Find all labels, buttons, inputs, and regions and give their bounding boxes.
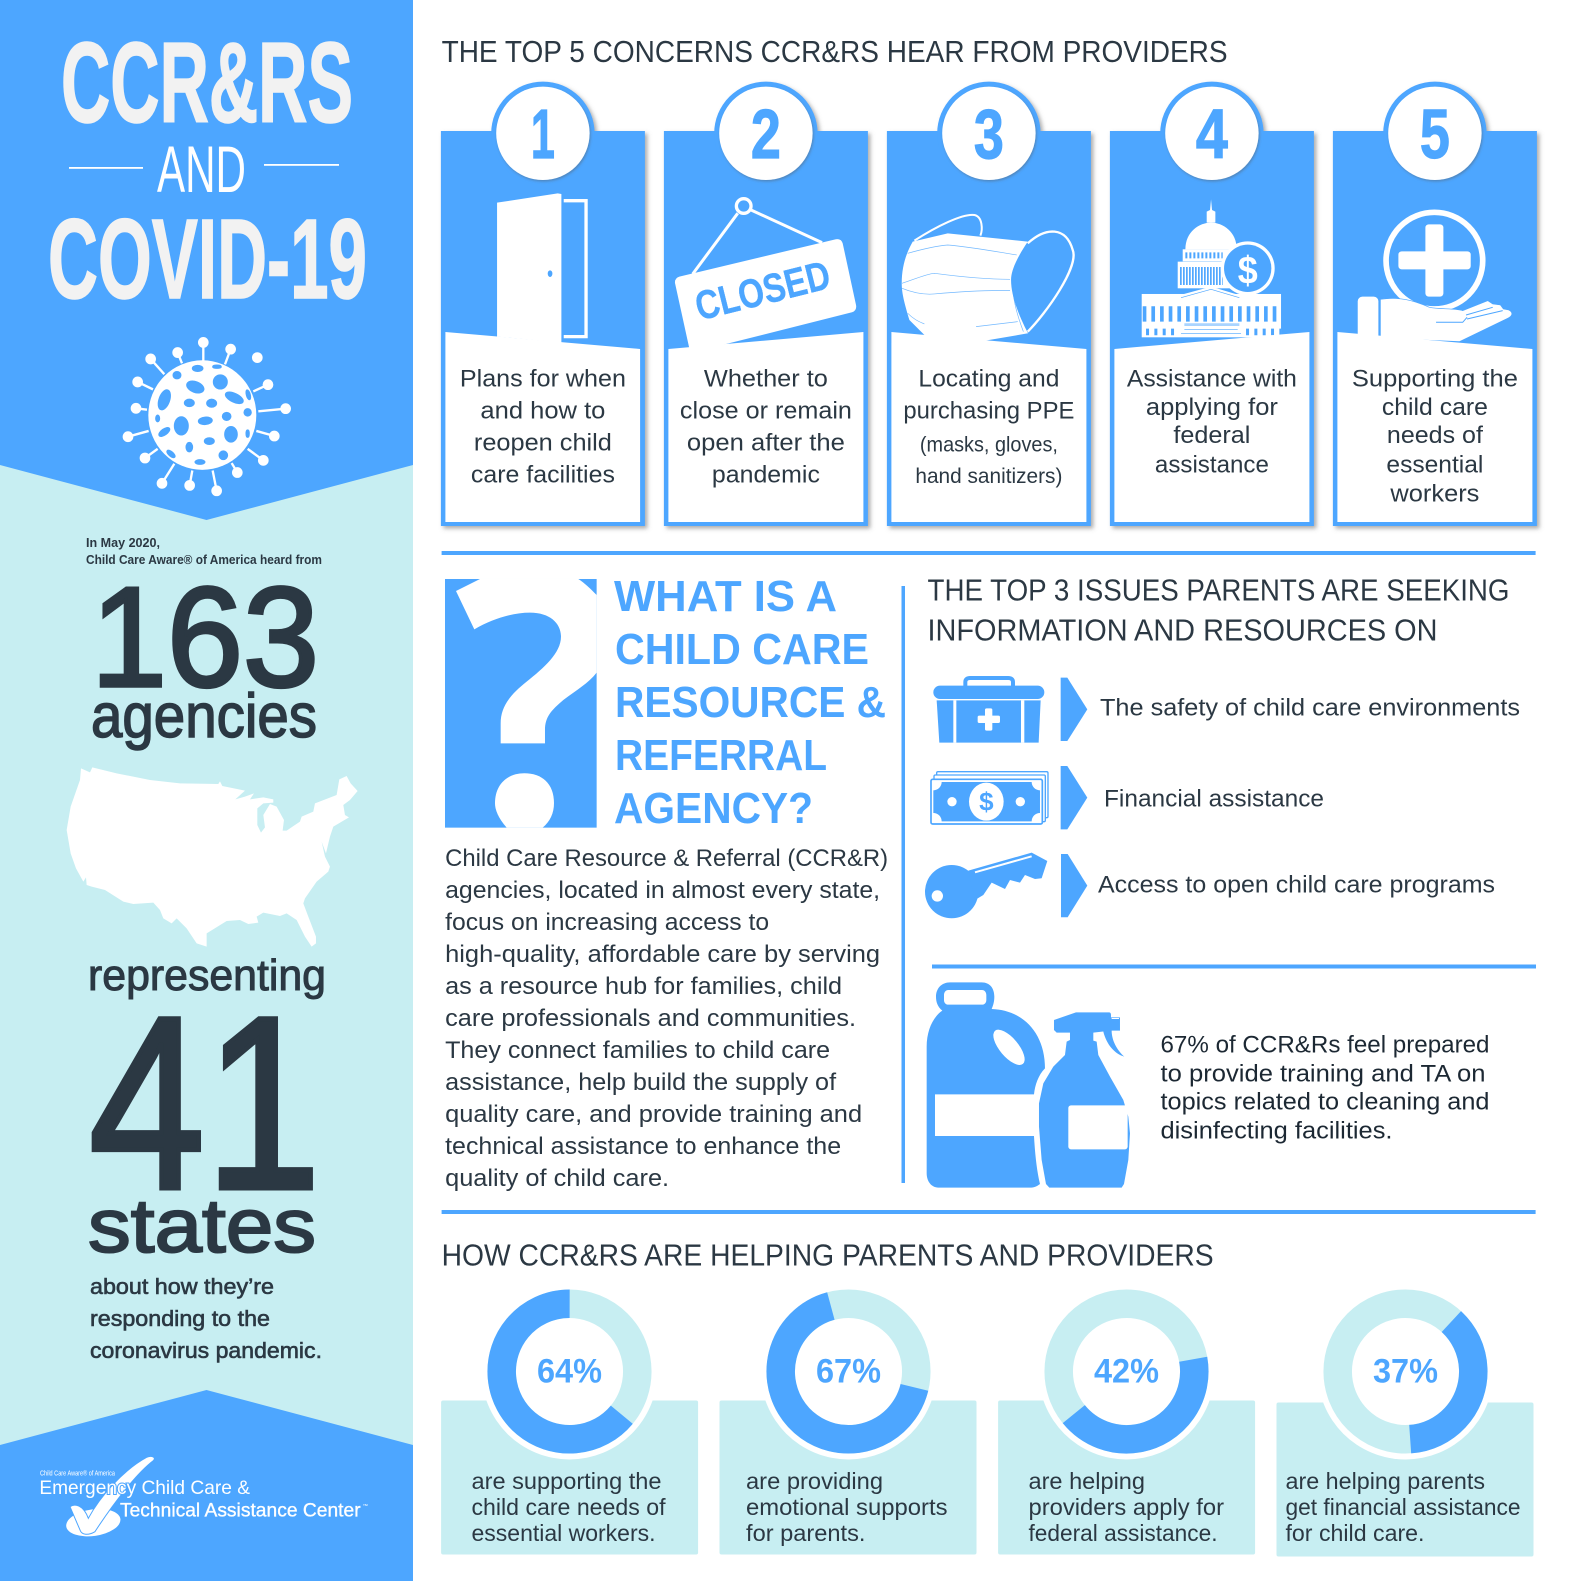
text: hand sanitizers) [915, 465, 1062, 488]
icon: cleaning bottles [927, 982, 1130, 1188]
text [460, 366, 626, 488]
title: AND with side lines: AND [157, 132, 246, 206]
text [1127, 366, 1297, 478]
text [472, 1468, 666, 1546]
text [1028, 1468, 1224, 1546]
text: Locating and [918, 366, 1059, 393]
panel: concern 1 [441, 82, 645, 526]
icon: stack of money [931, 772, 1048, 824]
text: representing: representing [88, 951, 326, 1000]
text: Whether to [704, 366, 828, 393]
icon: first aid kit [933, 678, 1044, 743]
logo: Emergency Child Care and Technical Assistance Center: Technical Assistance Center [120, 1501, 361, 1522]
text: for child care. [1286, 1520, 1424, 1546]
intro text: In May 2020, [86, 535, 160, 550]
text: get financial assistance [1286, 1494, 1520, 1520]
panel: 42 percent [998, 1284, 1255, 1554]
icon: closed sign [675, 199, 856, 352]
text block: CCR&R description: quality care, and provide training and [445, 1101, 862, 1128]
text block: CCR&R description: They connect families to child care [445, 1037, 830, 1064]
text block: CCR&R description: assistance, help build the supply of [445, 1069, 836, 1096]
text: (masks, gloves, [920, 434, 1058, 457]
text block: CCR&R description: quality of child care. [445, 1165, 669, 1192]
number 5: 5 [1420, 95, 1450, 173]
panel: concern 2 [664, 82, 868, 526]
text: about the pandemic [90, 1274, 322, 1363]
text: child care [1382, 394, 1488, 421]
text: are helping parents [1286, 1468, 1485, 1494]
heading: what is a CCR&R agency: RESOURCE & [615, 678, 886, 727]
intro text [86, 535, 322, 567]
text: applying for [1146, 394, 1278, 421]
text: providers apply for [1028, 1494, 1224, 1520]
intro text: Child Care Aware® of America heard from [86, 552, 322, 567]
panel: 64 percent [441, 1276, 698, 1554]
logo: Emergency Child Care and Technical Assistance Center: ™ [363, 1503, 368, 1509]
text: federal [1173, 422, 1250, 449]
text: 67 percent prepared: to provide training and TA on [1160, 1060, 1486, 1088]
heading: how CCR&Rs are helping: HOW CCR&RS ARE HELPING PARENTS AND PROVIDERS [442, 1238, 1214, 1272]
text [1352, 366, 1518, 508]
stat: 163 agencies: agencies [91, 682, 317, 751]
donut chart 67% [766, 1289, 931, 1454]
icon: open door [497, 193, 586, 343]
heading: top 3 issues: INFORMATION AND RESOURCES ON [928, 612, 1438, 648]
donut chart 42%: 42% [1094, 1352, 1159, 1390]
arrow [1061, 854, 1087, 917]
text: open after the [687, 430, 845, 456]
number 3: 3 [974, 95, 1004, 173]
text: financial: Financial assistance [1104, 786, 1324, 812]
text: purchasing PPE [903, 398, 1074, 424]
text: child care needs of [472, 1494, 666, 1520]
text [1286, 1468, 1520, 1546]
text: and how to [480, 398, 605, 424]
text: are providing [746, 1468, 883, 1494]
text block: CCR&R description: as a resource hub for families, child [445, 973, 842, 1000]
text: needs of [1387, 422, 1483, 449]
text: essential [1386, 452, 1483, 478]
text: close or remain [680, 398, 852, 424]
number 2: 2 [751, 95, 781, 173]
text: assistance [1155, 452, 1269, 478]
panel: concern 5 [1333, 82, 1537, 526]
logo: Emergency Child Care and Technical Assistance Center: Emergency Child Care & [39, 1478, 250, 1499]
text: for parents. [746, 1520, 866, 1546]
logo: Emergency Child Care and Technical Assistance Center [39, 1456, 368, 1540]
number 4: 4 [1196, 95, 1228, 173]
heading: top 3 issues: THE TOP 3 ISSUES PARENTS ARE SEEKING [928, 572, 1510, 608]
text block: CCR&R description [445, 845, 888, 1192]
text block: CCR&R description: Child Care Resource & Referral (CCR&R) [445, 845, 888, 872]
stat: 41 states: 41 [89, 966, 321, 1241]
heading: what is a CCR&R agency: AGENCY? [614, 784, 813, 833]
text: about the pandemic: about how they’re [90, 1274, 274, 1299]
title: CCR&RS: CCR&RS [61, 20, 353, 147]
stat: 163 agencies: 163 [91, 558, 319, 717]
text block: CCR&R description: high-quality, affordable care by serving [445, 941, 880, 968]
text [903, 366, 1074, 488]
text: are supporting the [472, 1468, 662, 1494]
donut chart 37%: 37% [1373, 1352, 1438, 1390]
text: about the pandemic: responding to the [90, 1306, 270, 1331]
panel: concern 4 [1110, 82, 1314, 526]
text: pandemic [712, 462, 820, 488]
heading: what is a CCR&R agency: REFERRAL [615, 731, 827, 780]
text block: CCR&R description: care professionals and communities. [445, 1005, 856, 1032]
text: Assistance with [1127, 366, 1297, 393]
text: safety: The safety of child care environments [1100, 694, 1520, 722]
top blue banner [0, 0, 413, 520]
text: access: Access to open child care programs [1098, 872, 1495, 898]
text: reopen child [474, 430, 612, 456]
text: 67 percent prepared: 67% of CCR&Rs feel prepared [1160, 1032, 1490, 1058]
text: 67 percent prepared: disinfecting facilities. [1160, 1118, 1392, 1144]
heading: top 3 issues [928, 572, 1510, 648]
text: are helping [1028, 1468, 1145, 1494]
text [746, 1468, 948, 1546]
icon: capitol building with dollar coin: $ [1238, 248, 1258, 292]
heading: top 5 concerns: THE TOP 5 CONCERNS CCR&RS HEAR FROM PROVIDERS [442, 34, 1228, 69]
panel: 67 percent [720, 1284, 976, 1554]
logo: Emergency Child Care and Technical Assistance Center: Child Care Aware® of America [40, 1470, 115, 1478]
icon: capitol building with dollar coin [1142, 199, 1281, 337]
icon: map of the United States [67, 767, 358, 947]
icon: key [925, 853, 1047, 918]
text: about the pandemic: coronavirus pandemic. [90, 1338, 322, 1363]
text: workers [1389, 481, 1479, 508]
heading: what is a CCR&R agency [614, 572, 886, 833]
icon: question mark block [445, 579, 597, 828]
icon: closed sign: CLOSED [690, 252, 835, 329]
text: 67 percent prepared [1160, 1032, 1490, 1144]
text [680, 366, 852, 488]
donut chart 67%: 67% [816, 1352, 881, 1390]
icon: face mask [902, 215, 1074, 342]
text: 67 percent prepared: topics related to cleaning and [1160, 1088, 1490, 1116]
text: care facilities [471, 462, 615, 488]
text: federal assistance. [1028, 1520, 1218, 1546]
panel: concern 3 [887, 82, 1091, 526]
text: Plans for when [460, 366, 626, 393]
number 1: 1 [531, 95, 555, 173]
donut chart 64%: 64% [537, 1352, 602, 1390]
donut chart 37% [1310, 1276, 1501, 1467]
panel: left sidebar [0, 0, 413, 1581]
text: Supporting the [1352, 366, 1518, 393]
heading: what is a CCR&R agency: WHAT IS A [614, 572, 837, 621]
text: emotional supports [746, 1494, 948, 1520]
icon: coronavirus [123, 337, 291, 496]
arrow [1061, 678, 1087, 741]
text: essential workers. [472, 1520, 656, 1546]
panel: 37 percent [1276, 1276, 1534, 1556]
text block: CCR&R description: focus on increasing access to [445, 909, 769, 936]
donut chart 64% [474, 1276, 665, 1467]
text block: CCR&R description: technical assistance to enhance the [445, 1133, 841, 1160]
bottom blue banner [0, 1390, 413, 1581]
arrow [1061, 766, 1087, 829]
title: COVID-19: COVID-19 [48, 196, 367, 322]
text block: CCR&R description: agencies, located in almost every state, [445, 877, 880, 904]
icon: stack of money: $ [979, 787, 994, 817]
donut chart 42% [1048, 1293, 1205, 1450]
icon: hand holding medical cross [1358, 212, 1512, 342]
heading: what is a CCR&R agency: CHILD CARE [615, 625, 869, 674]
stat: 41 states: states [88, 1184, 316, 1269]
